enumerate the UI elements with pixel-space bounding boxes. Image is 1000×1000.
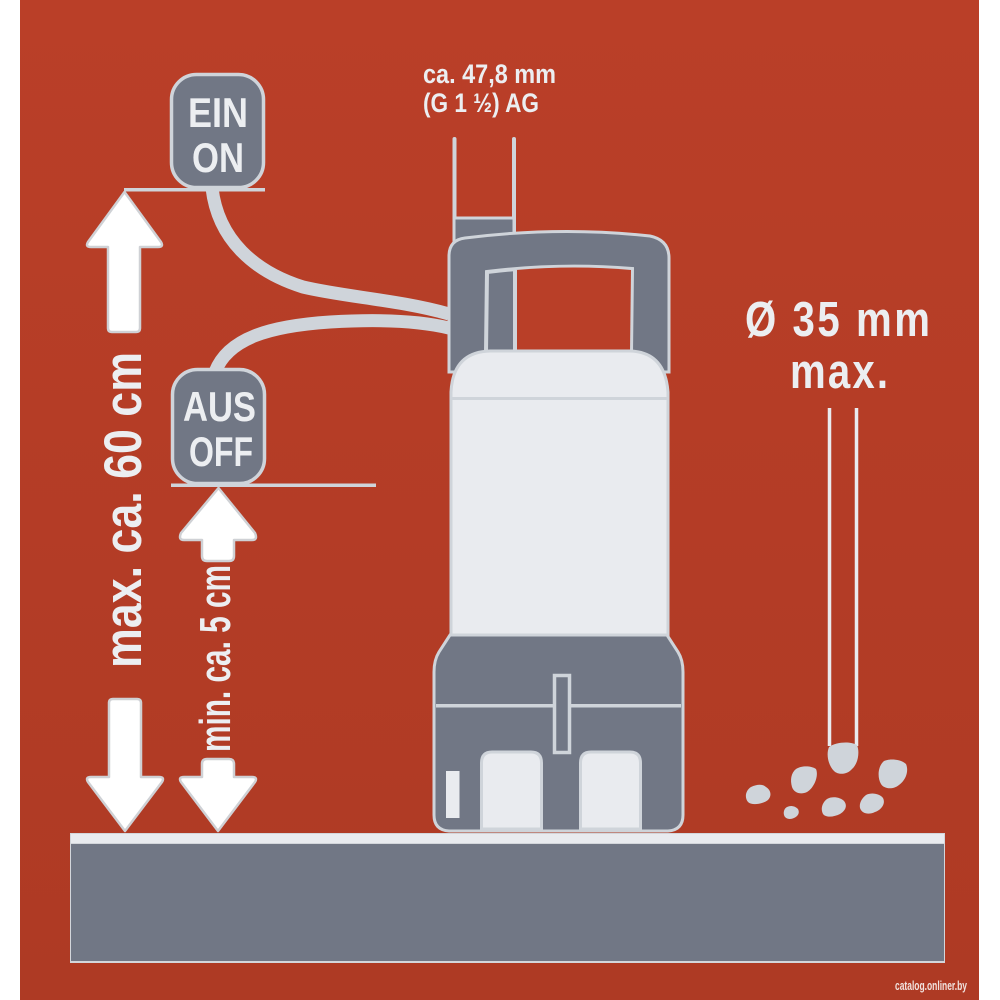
label: particle size: Ø 35 mm: [745, 292, 930, 347]
float switch: AUS OFF: OFF: [189, 428, 253, 475]
arrow: min down: [180, 759, 256, 831]
pump outlet dimension lines: [454, 139, 514, 232]
foot right: [580, 752, 640, 829]
label: max. ca. 60 cm: max. ca. 60 cm: [94, 352, 153, 668]
float switch: EIN ON: ON: [192, 134, 244, 181]
level line: off: [171, 484, 376, 487]
pump base: [434, 635, 683, 831]
foot left: [482, 752, 542, 829]
label: particle size: [745, 292, 930, 399]
label: min. ca. 5 cm: min. ca. 5 cm: [191, 565, 240, 752]
cable: lower float switch: [215, 321, 449, 372]
label: outlet size: [423, 59, 556, 118]
ground block: [70, 833, 945, 963]
label: outlet size: ca. 47,8 mm: [423, 59, 556, 89]
particle dimension lines: [830, 408, 856, 746]
cable: upper float switch: [212, 188, 449, 314]
base indicator: [446, 771, 460, 818]
float switch: AUS OFF: AUS: [183, 383, 256, 430]
level line: on: [124, 188, 265, 192]
arrow: max up: [87, 192, 162, 332]
pump outlet stub: [454, 218, 514, 242]
label: particle size: max.: [790, 344, 888, 399]
float switch: EIN ON: [172, 74, 264, 188]
pump: [434, 139, 683, 831]
handle opening: [486, 267, 632, 352]
pump handle: [449, 231, 669, 372]
gravel stones: [746, 743, 907, 819]
arrow: max down: [87, 699, 163, 831]
float switch: AUS OFF: [172, 370, 264, 484]
base latch: [554, 676, 570, 752]
pump body: [451, 351, 668, 640]
label: outlet size: (G 1 ½) AG: [423, 88, 539, 118]
arrow: min up: [180, 488, 256, 561]
float switch: EIN ON: EIN: [188, 89, 248, 136]
